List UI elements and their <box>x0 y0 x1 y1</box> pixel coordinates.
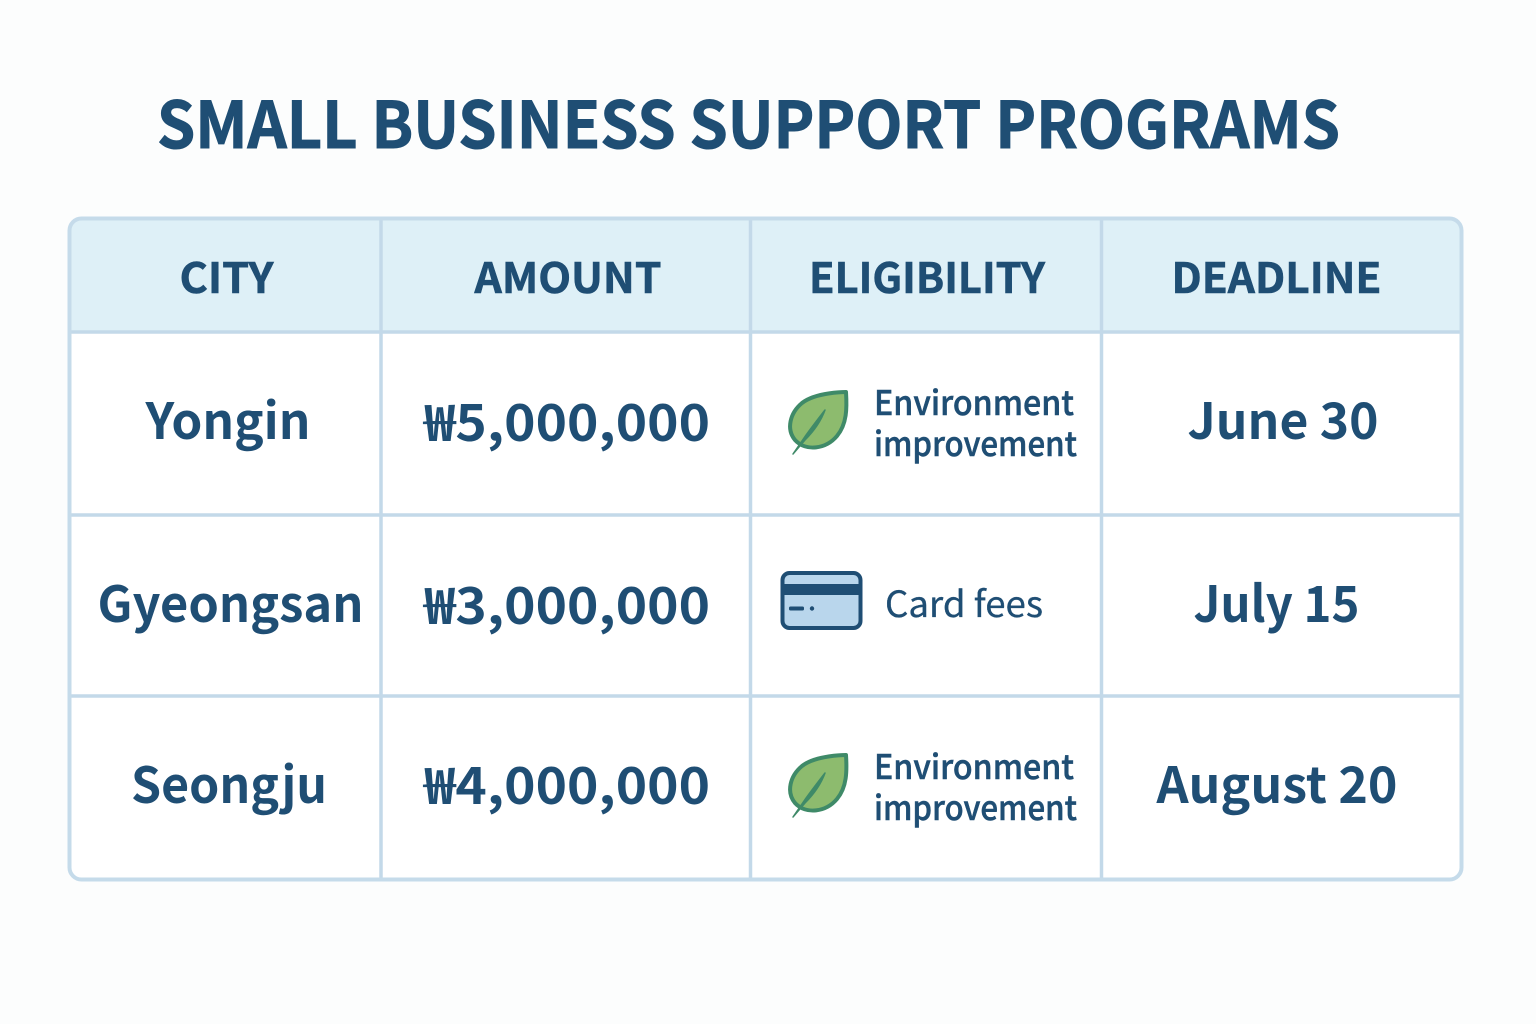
city: Gyeongsan: Gyeongsan <box>98 565 364 637</box>
city: Seongju: Seongju <box>131 746 327 818</box>
table <box>70 218 1462 880</box>
eligibility: environment improvement: Environment <box>874 376 1074 425</box>
amount: 3,000,000: ₩3,000,000 <box>422 567 710 639</box>
eligibility: environment improvement: Environment <box>874 740 1074 789</box>
eligibility: environment improvement: improvement <box>874 417 1077 466</box>
header row background <box>70 219 1461 331</box>
row: Seongju <box>131 740 1398 830</box>
amount: 5,000,000: ₩5,000,000 <box>422 384 710 456</box>
eligibility: card fees: Card fees <box>885 576 1043 628</box>
header: amount: AMOUNT <box>473 245 662 306</box>
city: Yongin: Yongin <box>145 382 310 454</box>
title: SMALL BUSINESS SUPPORT PROGRAMS <box>157 75 1340 167</box>
table body panel <box>70 219 1461 879</box>
row: Gyeongsan <box>98 565 1360 639</box>
deadline: June 30: June 30 <box>1188 382 1378 454</box>
deadline: August 20: August 20 <box>1155 746 1398 818</box>
eligibility: environment improvement <box>874 740 1077 830</box>
deadline: July 15: July 15 <box>1194 565 1360 637</box>
eligibility: environment improvement: improvement <box>874 781 1077 830</box>
header: deadline: DEADLINE <box>1172 245 1382 306</box>
header: city: CITY <box>180 245 274 306</box>
amount: 4,000,000: ₩4,000,000 <box>422 747 710 819</box>
eligibility: environment improvement <box>874 376 1077 466</box>
icon: credit card <box>782 573 861 628</box>
row: Yongin <box>145 376 1378 466</box>
icon: leaf <box>790 392 846 454</box>
icon: leaf <box>790 755 846 817</box>
header: eligibility: ELIGIBILITY <box>809 245 1046 306</box>
